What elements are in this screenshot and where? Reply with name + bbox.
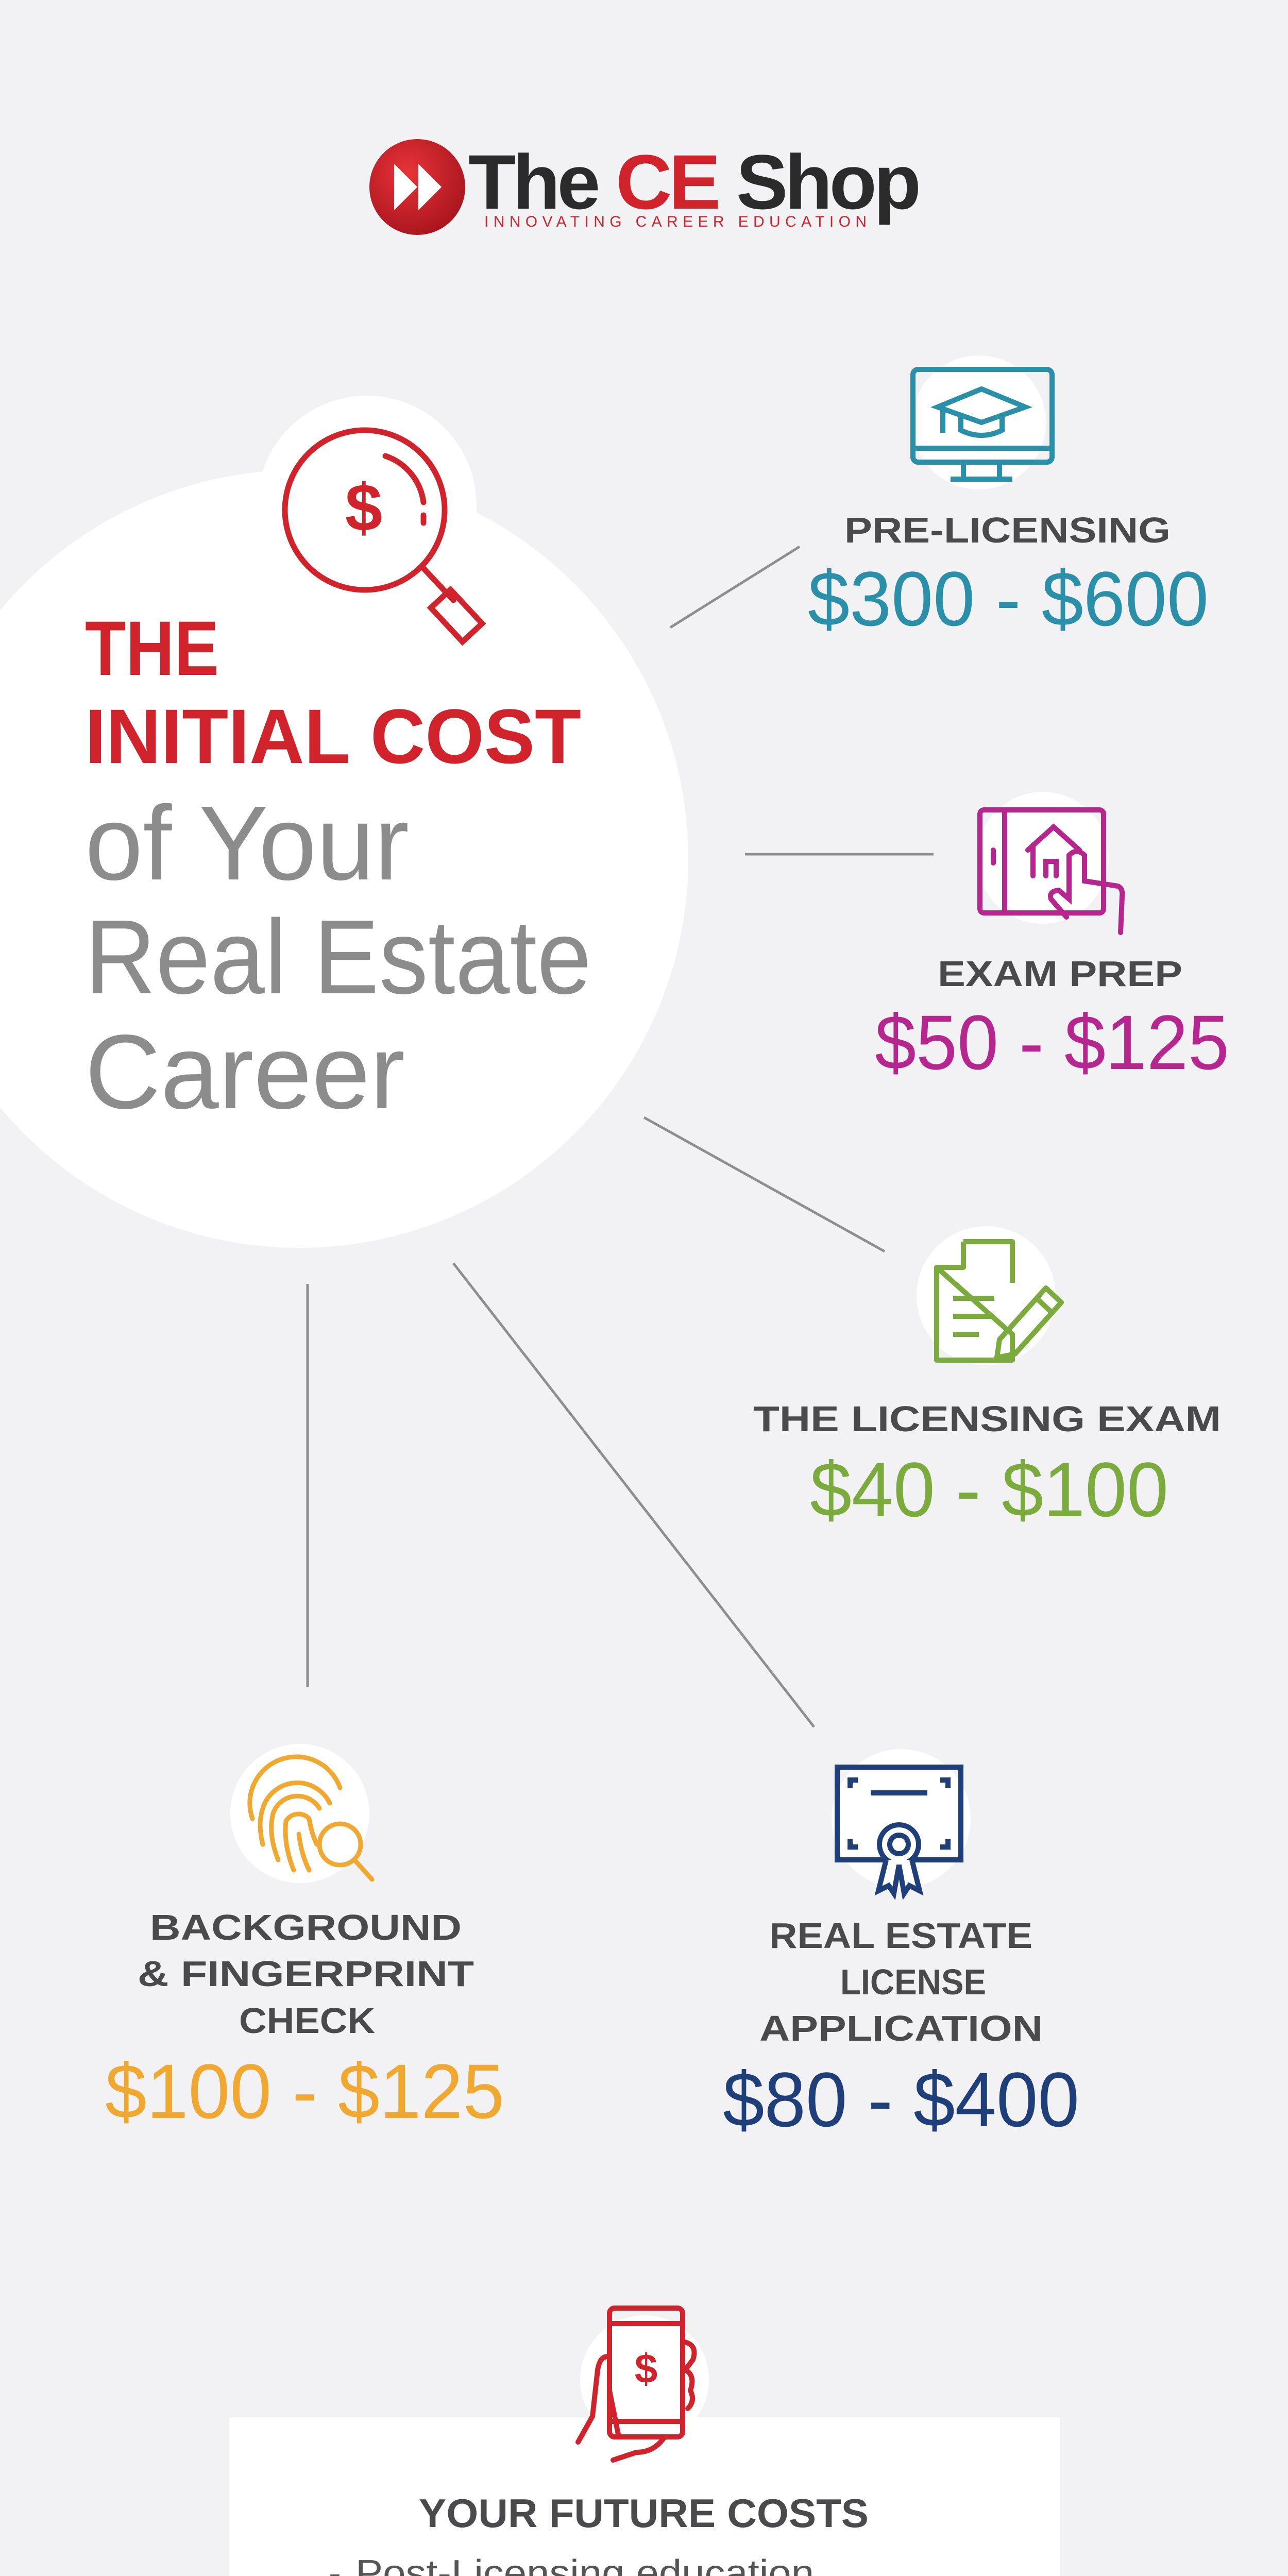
icon: certificate [832, 1749, 971, 1893]
item: pre-licensing [808, 355, 1209, 642]
item: exam prep [875, 792, 1229, 1086]
connector lines [308, 547, 934, 1727]
item: exam prep: EXAM PREP [938, 954, 1182, 994]
main circle [0, 396, 688, 1248]
icon: document with pencil [917, 1226, 1061, 1365]
panel: future costs [229, 2308, 1060, 2576]
title: Career [85, 1013, 405, 1131]
item: licensing exam: THE LICENSING EXAM [753, 1399, 1221, 1439]
title: THE [85, 605, 219, 691]
item: background & fingerprint check: $100 - $125 [105, 2048, 504, 2134]
item: licensing exam: $40 - $100 [810, 1446, 1168, 1533]
item: pre-licensing: $300 - $600 [808, 555, 1209, 642]
item: license application: APPLICATION [759, 2008, 1043, 2048]
icon: magnifier with dollar: $ [345, 470, 382, 545]
item: license application: LICENSE [840, 1962, 986, 2002]
icon: tablet with house [977, 792, 1122, 933]
header logo: The CE Shop [468, 139, 918, 225]
title: INITIAL COST [85, 693, 581, 779]
item: license application: $80 - $400 [723, 2056, 1079, 2143]
icon: phone in hand: $ [635, 2346, 657, 2392]
item: background & fingerprint check [105, 1744, 504, 2134]
title: of Your [85, 784, 409, 902]
header logo: INNOVATING CAREER EDUCATION [484, 213, 867, 230]
title [85, 605, 591, 1131]
item: pre-licensing: PRE-LICENSING [844, 510, 1171, 550]
item: background & fingerprint check: & FINGERPRINT [138, 1954, 474, 1994]
icon: fingerprint with magnifier [230, 1744, 372, 1883]
item: exam prep: $50 - $125 [875, 999, 1229, 1086]
title: Real Estate [85, 898, 591, 1016]
icon: magnifier with dollar [285, 430, 482, 642]
item: background & fingerprint check: CHECK [239, 2001, 375, 2041]
item: background & fingerprint check: BACKGROUND [150, 1907, 462, 1947]
panel: future costs: YOUR FUTURE COSTS [419, 2490, 869, 2536]
item: licensing exam [753, 1226, 1221, 1533]
icon: monitor with grad cap [912, 355, 1052, 489]
item: license application: REAL ESTATE [769, 1916, 1032, 1956]
list of future costs [329, 2553, 989, 2576]
item: license application [723, 1749, 1079, 2143]
icon: phone in hand [578, 2308, 709, 2460]
